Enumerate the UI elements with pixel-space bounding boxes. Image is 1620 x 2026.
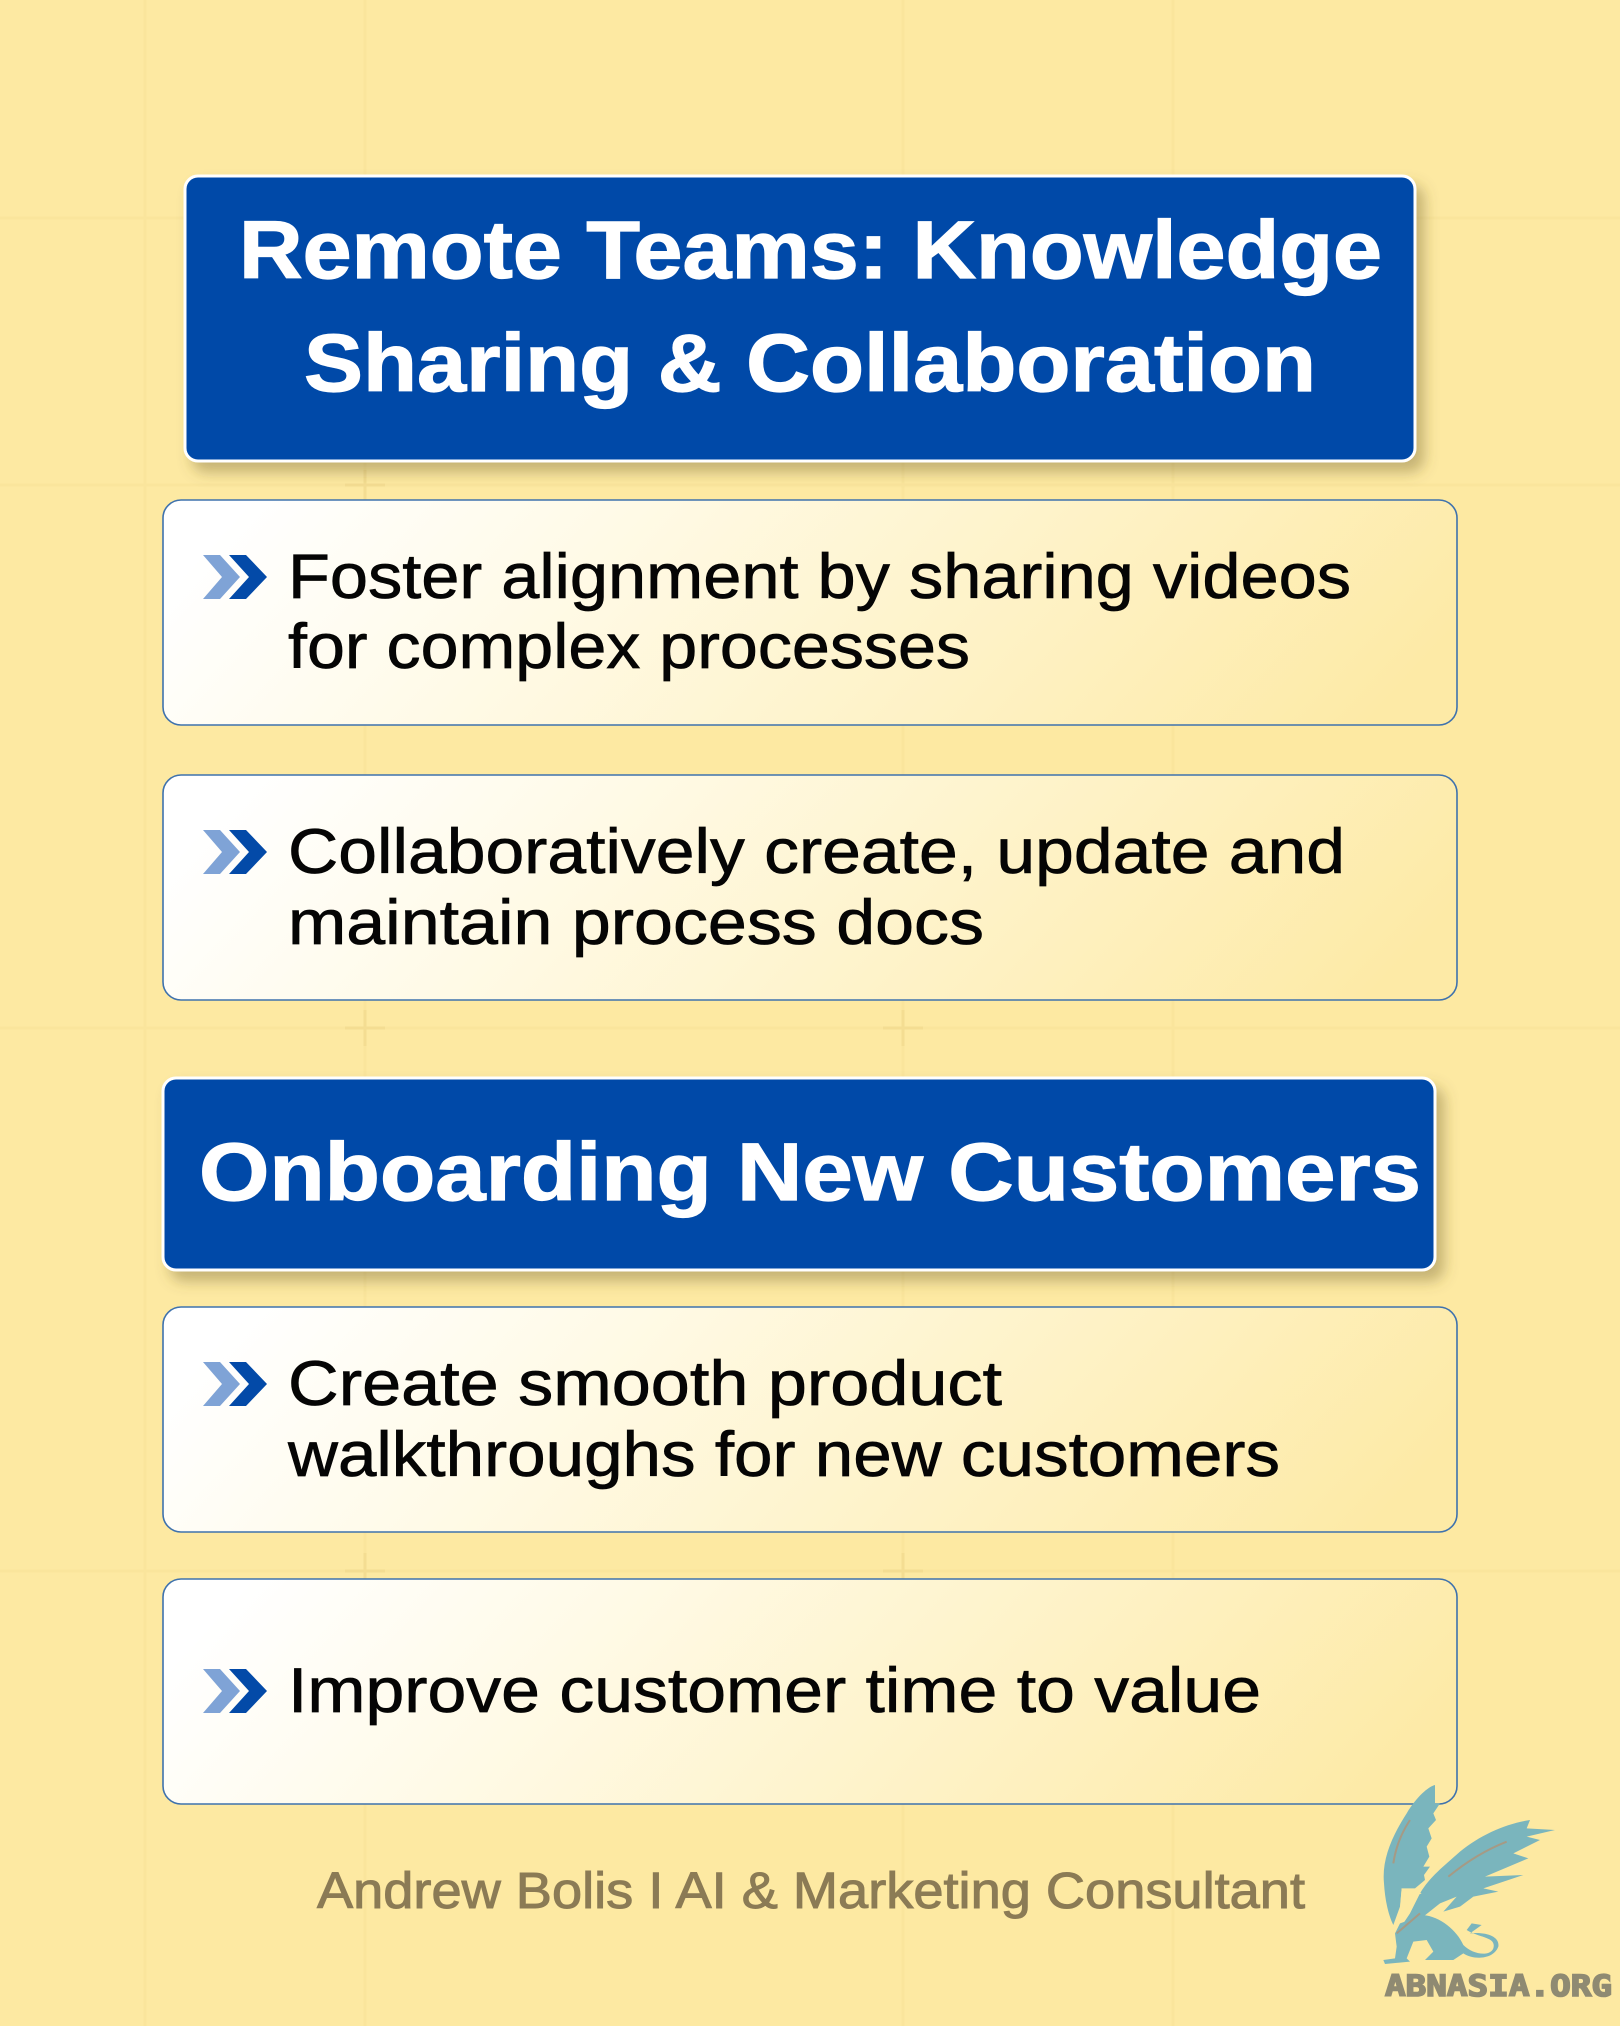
card text: walkthroughs for new customers — [287, 1420, 1280, 1490]
title text: Remote Teams: Knowledge — [239, 205, 1382, 296]
title text: Sharing & Collaboration — [304, 318, 1316, 409]
logo: griffin and wordmark — [1383, 1785, 1612, 2003]
section heading panel — [163, 1078, 1435, 1270]
card: time to value — [163, 1579, 1457, 1804]
card text: maintain process docs — [288, 888, 984, 958]
card: foster alignment — [163, 500, 1457, 725]
logo wordmark: ABNASIA.ORG — [1385, 1969, 1612, 2003]
icon: double chevron — [203, 1669, 267, 1713]
card text: Foster alignment by sharing videos — [288, 542, 1351, 612]
card text: for complex processes — [288, 612, 970, 682]
footer credit: Andrew Bolis I AI & Marketing Consultant — [317, 1862, 1305, 1919]
card text: Collaboratively create, update and — [288, 817, 1345, 887]
icon: double chevron — [203, 830, 267, 874]
card: collaboratively create — [163, 775, 1457, 1000]
card text: Improve customer time to value — [288, 1656, 1261, 1726]
heading text: Onboarding New Customers — [199, 1127, 1421, 1218]
icon: double chevron — [203, 1362, 267, 1406]
title panel — [185, 176, 1415, 461]
card text: Create smooth product — [288, 1349, 1003, 1419]
icon: double chevron — [203, 555, 267, 599]
card: product walkthroughs — [163, 1307, 1457, 1532]
